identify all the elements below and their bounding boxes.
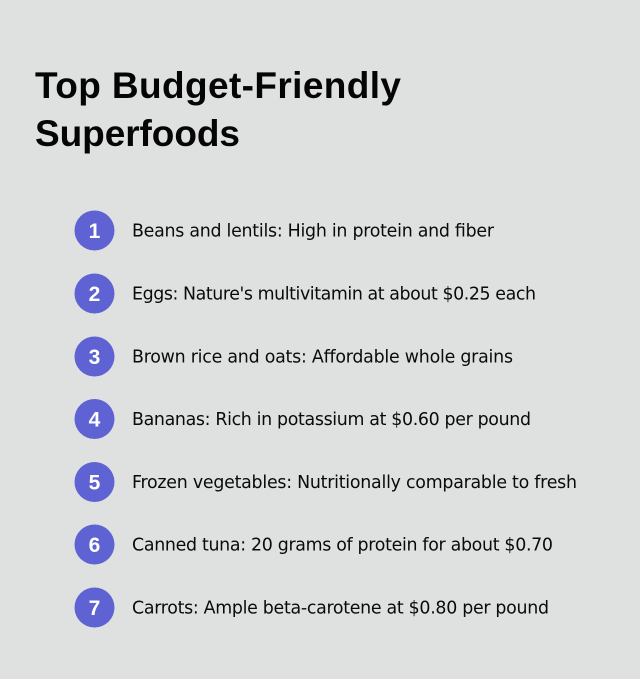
item 5: 5 (89, 472, 101, 494)
item 5: Frozen vegetables: Nutritionally comparable to fresh (132, 473, 577, 493)
title: Superfoods (35, 113, 240, 154)
item 3: 3 (89, 346, 100, 369)
item 4: Bananas: Rich in potassium at $0.60 per pound (132, 410, 531, 430)
item 1 (74, 210, 495, 250)
item 2 (74, 274, 536, 314)
title (35, 65, 401, 154)
item 3: Brown rice and oats: Affordable whole grains (132, 348, 513, 368)
item 7: Carrots: Ample beta-carotene at $0.80 per pound (132, 598, 549, 618)
item 7: 7 (89, 597, 100, 620)
item 4 (74, 399, 531, 439)
item 6 (74, 524, 553, 564)
item 7 (74, 588, 549, 628)
item 6: Canned tuna: 20 grams of protein for about $0.70 (132, 536, 553, 556)
item 4: 4 (89, 408, 101, 432)
item 6: 6 (89, 534, 100, 557)
item 3 (74, 336, 513, 376)
item 1: 1 (89, 220, 101, 243)
item 5 (74, 462, 577, 502)
item 2: Eggs: Nature's multivitamin at about $0.25 each (132, 284, 536, 304)
list of superfoods (74, 210, 577, 628)
item 2: 2 (89, 283, 100, 306)
item 1: Beans and lentils: High in protein and fiber (132, 222, 495, 242)
title: Top Budget-Friendly (35, 65, 401, 106)
